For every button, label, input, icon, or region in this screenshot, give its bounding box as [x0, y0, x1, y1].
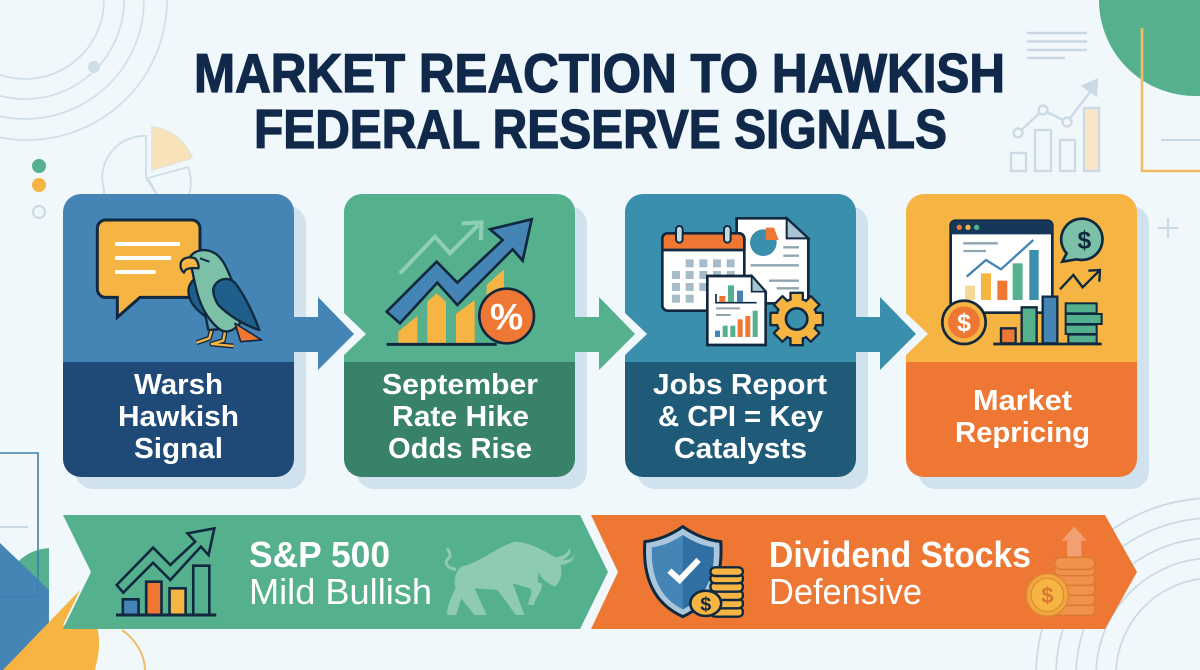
icon: pale coins with up arrow: $ [1041, 583, 1054, 608]
arrow: step 1 to step 2 [294, 297, 366, 370]
label: September Rate Hike Odds Rise [382, 369, 538, 465]
decoration: top-right green circle and gold frame [1099, 0, 1200, 171]
icon: rising arrow, bars and percent badge [387, 219, 534, 344]
icon: rising chart [116, 528, 216, 615]
label: Jobs Report and CPI key catalysts: Catalysts [674, 433, 807, 465]
icon: market dashboard, coins and bars: $ [957, 310, 971, 337]
icon: shield with check and coins: $ [700, 594, 711, 616]
icon: market dashboard, coins and bars: $ [1077, 228, 1091, 255]
label: Warsh Hawkish Signal [118, 369, 239, 465]
decoration: bottom-right concentric arcs [1036, 498, 1200, 670]
arrow: step 3 to step 4 [856, 297, 928, 370]
label: September Rate Hike Odds Rise: Rate Hike [392, 401, 529, 433]
decoration: pale bar and line chart [1011, 80, 1099, 171]
label: September Rate Hike Odds Rise: Odds Rise [388, 433, 532, 465]
label: S&P 500 Mild Bullish [249, 534, 432, 612]
label: Jobs Report and CPI key catalysts: Jobs Report [653, 369, 827, 401]
icon: shield with check and coins [645, 527, 743, 617]
label: September Rate Hike Odds Rise: September [382, 369, 538, 401]
banner: S&P 500 Mild Bullish [63, 515, 608, 629]
icon: pale coins with up arrow [1026, 527, 1095, 616]
label: S&P 500 Mild Bullish: Mild Bullish [249, 571, 432, 612]
icon: bull silhouette [446, 542, 575, 615]
icon: hawk [181, 250, 262, 346]
arrow: step 2 to step 3 [575, 297, 647, 370]
panel: Market Repricing [906, 194, 1149, 489]
panel: September Rate Hike Odds Rise [344, 194, 587, 489]
label: Dividend Stocks Defensive [769, 534, 1031, 612]
decoration: top-left concentric arcs [0, 0, 167, 140]
panel: Warsh Hawkish Signal [63, 194, 306, 489]
panel: Jobs Report and CPI key catalysts [625, 194, 868, 489]
decoration: pale pie chart [102, 127, 192, 200]
banner: Dividend Stocks Defensive [591, 515, 1137, 629]
title: MARKET REACTION TO HAWKISH [194, 42, 1005, 104]
icon: calendar, reports and gear [662, 218, 824, 346]
label: Dividend Stocks Defensive: Defensive [769, 571, 922, 612]
label: Market Repricing: Market [973, 385, 1072, 417]
decoration: bottom-left geometric shapes [0, 453, 145, 670]
icon: rising arrow, bars and percent badge: % [490, 295, 523, 337]
label: Market Repricing: Repricing [955, 417, 1090, 449]
label: Market Repricing [955, 385, 1090, 449]
title [194, 42, 1005, 160]
label: Warsh Hawkish Signal: Signal [134, 433, 223, 465]
decoration: plus sign [1158, 218, 1178, 238]
icon: market dashboard, coins and bars [942, 219, 1103, 344]
decoration: three status dots [32, 159, 46, 218]
decoration: pale text lines [1027, 33, 1087, 58]
label: Jobs Report and CPI key catalysts [653, 369, 827, 465]
label: Dividend Stocks Defensive: Dividend Stocks [769, 534, 1031, 575]
label: Warsh Hawkish Signal: Warsh [134, 369, 223, 401]
label: Jobs Report and CPI key catalysts: & CPI = Key [658, 401, 823, 433]
label: S&P 500 Mild Bullish: S&P 500 [249, 534, 390, 575]
icon: speech bubble [97, 220, 200, 317]
label: Warsh Hawkish Signal: Hawkish [118, 401, 239, 433]
title: FEDERAL RESERVE SIGNALS [254, 98, 947, 160]
